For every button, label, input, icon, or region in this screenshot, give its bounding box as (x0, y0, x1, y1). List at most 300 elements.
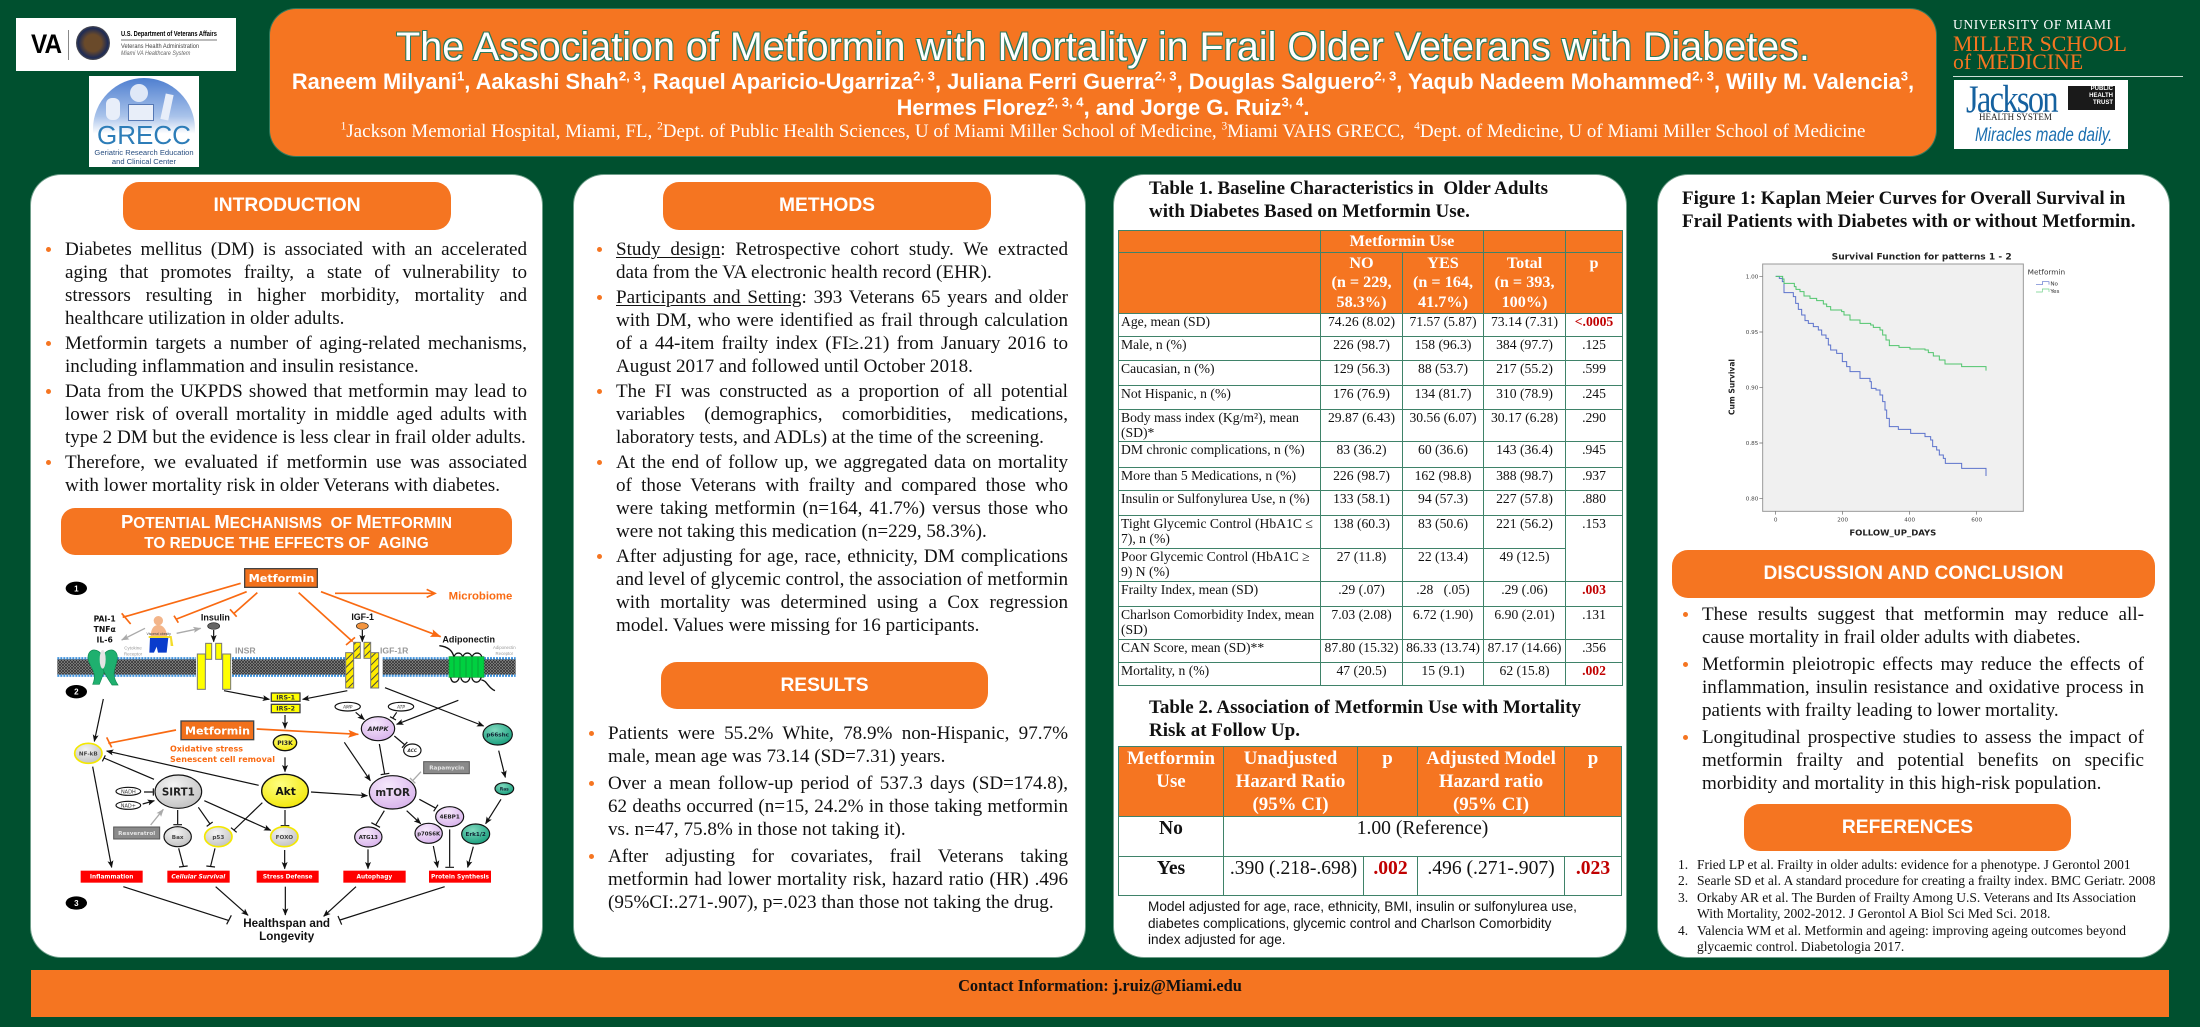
text block: introduction: including inflammation and insulin resistance. (65, 356, 419, 377)
logo: Jackson Health System: HEALTH (2089, 93, 2113, 99)
plot area (1763, 264, 2023, 511)
black molecule labels: Insulin (201, 612, 230, 622)
table 1: baseline characteristics: 133 (58.1) (1333, 491, 1390, 506)
logo: VA Miami: U.S. Department of Veterans Affairs (121, 29, 217, 38)
chart legend: No (2050, 282, 2059, 288)
orange metformin inhibition and activation arrows (107, 583, 441, 747)
y axis title: Cum Survival (1728, 359, 1737, 415)
IRS boxes: IRS-2 (276, 706, 295, 713)
step markers 1 2 3: 2 (74, 688, 79, 697)
table 2 title (1149, 697, 1581, 741)
table 1: baseline characteristics: .356 (1582, 640, 1606, 655)
heading: discussion and conclusion: DISCUSSION AND CONCLUSION (1764, 563, 2063, 584)
ligands (208, 623, 368, 629)
table 2: mortality risk: p (1382, 748, 1393, 769)
text block: methods: with DM, who were identified as frail through calculation (616, 310, 1068, 331)
heading: methods: METHODS (779, 195, 875, 216)
table 1: baseline characteristics: .29 (.07) (1338, 582, 1385, 597)
y axis ticks and labels (1746, 274, 1763, 503)
black molecule labels: Adiponectin (442, 634, 495, 644)
grey drug effects (151, 772, 421, 825)
table 1: baseline characteristics: .245 (1582, 386, 1606, 400)
text block: methods: laboratory tests, and ADLs) at the time of the screening. (616, 427, 1044, 448)
chart title: Survival Function for patterns 1 - 2 (1832, 253, 2012, 263)
orange labels: Senescent cell removal (170, 755, 275, 764)
table 1: baseline characteristics: Total (1507, 254, 1542, 272)
table 1: baseline characteristics: Not Hispanic, n (%) (1121, 386, 1231, 400)
black molecule labels: TNFα (94, 625, 116, 634)
table 1: baseline characteristics: .131 (1582, 607, 1606, 622)
grey nodes: NF-kB (79, 751, 98, 757)
table 1: baseline characteristics: 6.90 (2.01) (1494, 607, 1555, 622)
y axis ticks and labels: 0.85 (1746, 441, 1759, 447)
black inhibition lines (102, 712, 454, 925)
grey nodes: SIRT1 (162, 786, 195, 798)
orange labels: Oxidative stress (170, 745, 243, 754)
step markers 1 2 3: 3 (74, 899, 79, 908)
x axis ticks and labels: 400 (1904, 517, 1915, 523)
red outcome boxes (81, 871, 491, 883)
text block: discussion: morbidity and mortality in this high-risk population. (1702, 773, 2101, 794)
y axis ticks and labels: 0.90 (1746, 386, 1759, 392)
table 1: baseline characteristics: DM chronic complications, n (%) (1121, 442, 1305, 457)
table 1 title: with Diabetes Based on Metformin Use. (1149, 201, 1470, 222)
table 1: baseline characteristics: 86.33 (13.74) (1406, 640, 1480, 655)
yellow nodes: PI3K (277, 740, 293, 747)
table 2: mortality risk: Yes (1157, 858, 1185, 879)
table 1: baseline characteristics: .290 (1582, 410, 1606, 424)
black molecule labels: IGF-1 (351, 612, 374, 622)
x axis ticks and labels: 0 (1774, 517, 1778, 523)
text block: references: Searle SD et al. A standard procedure for creating a frailty index. BMC Geriatr. 2008 (1697, 873, 2156, 888)
text block: methods: of those Veterans with frailty and compared those who (616, 475, 1068, 496)
y axis ticks and labels: 0.95 (1746, 330, 1759, 336)
panel: tables (1114, 175, 1626, 957)
grey nodes: p53 (212, 835, 224, 841)
heading: introduction (123, 182, 451, 230)
table 2: mortality risk: Hazard Ratio (1236, 771, 1345, 792)
black molecule labels (94, 612, 495, 644)
table 1: baseline characteristics: .945 (1582, 442, 1606, 457)
panel: figure and discussion (1658, 175, 2169, 957)
grey nodes (75, 743, 298, 847)
table 1: baseline characteristics: .599 (1582, 360, 1606, 376)
text block: methods: August 2017 and followed until October 2018. (616, 356, 973, 377)
small white nodes: NAD+ (121, 803, 136, 809)
text block: results: male, mean age was 73.14 (SD=7.31) years. (608, 746, 945, 767)
table 1: baseline characteristics: 83 (36.2) (1336, 442, 1386, 457)
text block: discussion (1683, 604, 2144, 794)
red outcome boxes: Autophagy (356, 875, 392, 881)
text block: references (1678, 857, 2156, 954)
chart: Kaplan Meier survival curves (1728, 252, 2065, 538)
heading: potential mechanisms of metformin: POTENTIAL MECHANISMS OF METFORMIN (121, 511, 452, 532)
text block: methods (597, 239, 1068, 636)
table 1: baseline characteristics: 30.17 (6.28) (1491, 410, 1558, 424)
text block: introduction: Diabetes mellitus (DM) is associated with an accelerated (65, 239, 527, 260)
text block: introduction: aging that promotes frailty, a state of vulnerability to (65, 262, 527, 283)
table 1: baseline characteristics: .002 (1582, 663, 1606, 678)
small white nodes: AMP (342, 704, 353, 710)
small white nodes (116, 702, 421, 809)
text block: references: glycaemic control. Diabetologia 2017. (1697, 939, 1904, 954)
table 1: baseline characteristics: 100%) (1502, 292, 1547, 310)
insulin receptor INSR (197, 643, 256, 689)
text block: methods: were not taking this medication (n=229, 58.3%). (616, 521, 987, 542)
table 1: baseline characteristics: .28 (.05) (1416, 582, 1470, 597)
text block: methods: Participants and Setting: 393 Veterans 65 years and older (616, 287, 1068, 308)
table 1: baseline characteristics: (n = 393, (1494, 273, 1555, 291)
text block: introduction: stressors resulting in higher morbidity, mortality and (65, 285, 527, 306)
text block: results: vs. n=47, 75.8% in those not taking it). (608, 819, 906, 840)
y axis ticks and labels: 1.00 (1746, 274, 1759, 280)
drug boxes: Resveratrol (118, 831, 155, 837)
logo: GRECC: GRECC (97, 120, 191, 150)
table 1: baseline characteristics: 74.26 (8.02) (1328, 314, 1395, 328)
panel: methods and results (574, 175, 1085, 957)
table 1: baseline characteristics: .003 (1582, 582, 1606, 597)
heading: potential mechanisms of metformin (61, 508, 512, 555)
table 1: baseline characteristics: 94 (57.3) (1418, 491, 1468, 506)
IGF-1 receptor: IGF-1R (380, 645, 409, 655)
text block: results: Patients were 55.2% White, 78.9% non-Hispanic, 97.7% (608, 723, 1068, 744)
logo: VA Miami: VA (31, 29, 61, 59)
teal nodes: p66shc (486, 732, 509, 738)
table 2 footnote: Model adjusted for age, race, ethnicity, BMI, insulin or sulfonylurea use, (1148, 899, 1577, 914)
table 1 title: Table 1. Baseline Characteristics in Older Adults (1149, 178, 1548, 199)
text block: methods: were taking metformin (n=164, 41.7%) versus those who (616, 498, 1068, 519)
purple nodes: ATG13 (359, 835, 378, 841)
table 2: mortality risk: .496 (.271-.907) (1427, 858, 1555, 879)
cytokine receptor: Cytokine (124, 645, 142, 650)
table 1: baseline characteristics: .153 (1582, 516, 1606, 531)
table 1: baseline characteristics: 87.17 (14.66) (1488, 640, 1561, 655)
yellow nodes: Akt (275, 785, 296, 798)
x axis ticks and labels (1774, 511, 1982, 523)
logo: Jackson Health System: Miracles made daily. (1975, 125, 2112, 146)
table 1: baseline characteristics: 29.87 (6.43) (1328, 410, 1395, 424)
table 1: baseline characteristics: 49 (12.5) (1500, 549, 1550, 564)
orange labels: Microbiome (449, 590, 512, 602)
table 1: baseline characteristics: .125 (1582, 336, 1606, 352)
table 1 title (1149, 178, 1548, 222)
healthspan and longevity label (243, 917, 330, 943)
diagram: metformin mechanisms pathway (57, 568, 516, 943)
text block: discussion: Longitudinal prospective studies to assess the impact of (1702, 727, 2144, 748)
table 1: baseline characteristics: 143 (36.4) (1496, 442, 1553, 457)
adiponectin receptor: Adiponectin (493, 645, 516, 650)
black molecule labels: IL-6 (97, 635, 113, 644)
table 1: baseline characteristics: 226 (98.7) (1333, 468, 1390, 483)
text block: results: Over a mean follow-up period of 537.3 days (SD=174.8), (608, 773, 1068, 794)
adiponectin receptor (439, 645, 516, 691)
table 2 title: Risk at Follow Up. (1149, 720, 1300, 741)
table 2: mortality risk: 1.00 (Reference) (1357, 818, 1488, 839)
red outcome boxes: Inflammation (90, 875, 133, 881)
text block: results: 62 deaths occurred (n=15, 24.2% in those taking metformin (608, 796, 1068, 817)
text block: methods: model. Values were missing for 16 participants. (616, 615, 979, 636)
table 1: baseline characteristics: More than 5 Medications, n (%) (1121, 468, 1296, 483)
table 1: baseline characteristics: .29 (.06) (1501, 582, 1548, 597)
logo: VA Miami: Miami VA Healthcare System (121, 50, 190, 57)
footer: contact information: Contact Information: j.ruiz@Miami.edu (958, 976, 1242, 995)
step markers 1 2 3: 1 (74, 584, 79, 593)
table 1: baseline characteristics: 88 (53.7) (1418, 360, 1468, 376)
heading: discussion and conclusion (1672, 550, 2155, 598)
purple nodes: p70S6K (417, 831, 441, 837)
x axis title: FOLLOW_UP_DAYS (1849, 529, 1936, 538)
table 1: baseline characteristics: 384 (97.7) (1496, 336, 1553, 352)
table 1: baseline characteristics: 15 (9.1) (1421, 663, 1465, 678)
purple nodes: AMPK (367, 726, 389, 733)
insulin receptor INSR: INSR (235, 645, 256, 655)
table 1: baseline characteristics: 134 (81.7) (1415, 386, 1471, 400)
red outcome boxes: Protein Synthesis (431, 875, 490, 881)
teal nodes: Ras (500, 786, 509, 792)
purple nodes: mTOR (375, 787, 410, 799)
person icon: visceral obesity: Visceral obesity (146, 632, 171, 636)
small white nodes: ACC (407, 748, 418, 754)
chart legend: Yes (2049, 289, 2060, 295)
text block: results: After adjusting for covariates, frail Veterans taking (608, 846, 1068, 867)
text block: methods: of a 44-item frailty index (FI≥.21) from January 2016 to (616, 333, 1068, 354)
affiliations: 1Jackson Memorial Hospital, Miami, FL, 2Dept. of Public Health Sciences, U of Miami Miller School of Medicine, 3Miami VAHS GRECC, 4Dept. of Medicine, U of Miami Miller School of Medicine (341, 121, 1865, 142)
panel: introduction and mechanisms (31, 175, 542, 957)
yellow nodes (262, 735, 308, 808)
table 1: baseline characteristics: 73.14 (7.31) (1491, 314, 1558, 328)
table 1: baseline characteristics: 27 (11.8) (1337, 549, 1386, 564)
table 1: baseline characteristics: Frailty Index, mean (SD) (1121, 582, 1258, 597)
table 2: mortality risk: .023 (1576, 858, 1610, 879)
text block: results (589, 723, 1068, 913)
logo: University of Miami Miller School of Medicine: MILLER SCHOOL (1953, 32, 2127, 56)
table 1: baseline characteristics: YES (1427, 254, 1459, 272)
text block: references: 1. (1678, 857, 1688, 872)
table 1: baseline characteristics: (n = 164, (1413, 273, 1473, 291)
text block: results: (95%CI:.271-.907), p=.023 than those not taking the drug. (608, 892, 1054, 913)
table 1: baseline characteristics: Poor Glycemic Control (HbA1C ≥ 9) N (%) (1121, 549, 1310, 579)
text block: introduction: lower risk of overall mortality in middle aged adults with (65, 404, 527, 425)
text block: discussion: metformin frailty and potential benefits on specific (1702, 750, 2144, 771)
y axis ticks and labels: 0.80 (1746, 497, 1759, 503)
figure title: Frail Patients with Diabetes with or without Metformin. (1682, 211, 2135, 232)
red outcome boxes: Stress Defense (263, 875, 313, 881)
heading: methods (663, 182, 991, 230)
logo: Jackson Health System: PUBLIC (2091, 86, 2113, 92)
grey nodes: Bax (172, 835, 184, 841)
table 2 footnote (1148, 899, 1577, 947)
table 1: baseline characteristics: 87.80 (15.32) (1325, 640, 1398, 655)
metformin box middle: Metformin (185, 724, 250, 737)
grey nodes: FOXO (276, 835, 293, 841)
logo: University of Miami Miller School of Medicine: of MEDICINE (1953, 50, 2083, 74)
table 1: baseline characteristics: 41.7%) (1418, 292, 1468, 310)
text block: references: 3. (1678, 890, 1688, 905)
drug boxes (114, 762, 469, 839)
table 1: baseline characteristics: Body mass index (Kg/m²), mean (SD)* (1121, 410, 1299, 440)
table 1: baseline characteristics: 217 (55.2) (1496, 360, 1553, 376)
logo: VA Miami (16, 18, 236, 71)
text block: methods: The FI was constructed as a proportion of all potential (616, 381, 1068, 402)
table 1: baseline characteristics: 226 (98.7) (1333, 336, 1390, 352)
table 2: mortality risk: (95% CI) (1453, 794, 1529, 815)
text block: introduction: type 2 DM but the evidence is less clear in frail older adults. (65, 427, 526, 448)
drug boxes: Rapamycin (429, 766, 464, 772)
text block: introduction: Therefore, we evaluated if metformin use was associated (65, 452, 527, 473)
table 1: baseline characteristics: Mortality, n (%) (1121, 663, 1209, 678)
teal nodes (462, 724, 514, 844)
table 1: baseline characteristics: p (1590, 254, 1599, 272)
logo: Jackson Health System: Jackson (1966, 78, 2057, 121)
text block: methods: After adjusting for age, race, ethnicity, DM complications (616, 546, 1068, 567)
text block: references: 4. (1678, 923, 1688, 938)
x axis ticks and labels: 200 (1837, 517, 1848, 523)
table 2: mortality risk: .390 (.218-.698) (1230, 858, 1357, 879)
metformin box middle (181, 721, 254, 740)
table 1: baseline characteristics: CAN Score, mean (SD)** (1121, 640, 1264, 655)
table 2 title: Table 2. Association of Metformin Use with Mortality (1149, 697, 1581, 718)
logo: GRECC: Geriatric Research Education (94, 148, 194, 157)
text block: methods: At the end of follow up, we aggregated data on mortality (616, 452, 1068, 473)
small white nodes: ATP (396, 704, 405, 710)
logo: VA Miami: Veterans Health Administration (121, 43, 199, 50)
table 1: baseline characteristics: 6.72 (1.90) (1413, 607, 1473, 622)
teal nodes: Erk1/2 (465, 832, 486, 838)
table 1: baseline characteristics: 47 (20.5) (1336, 663, 1386, 678)
table 2: mortality risk: No (1159, 818, 1183, 839)
text block: references: 2. (1678, 873, 1688, 888)
heading: potential mechanisms of metformin: TO REDUCE THE EFFECTS OF AGING (144, 535, 429, 552)
footer: contact information (31, 970, 2169, 1017)
IRS boxes: IRS-1 (276, 694, 295, 701)
text block: discussion: These results suggest that metformin may reduce all- (1702, 604, 2144, 625)
text block: methods: with mortality was determined using a Cox regression (616, 592, 1068, 613)
table 1: baseline characteristics: 388 (98.7) (1496, 468, 1553, 483)
IRS boxes (271, 693, 300, 713)
table 1: baseline characteristics: .880 (1582, 491, 1606, 506)
table 1: baseline characteristics: 7.03 (2.08) (1331, 607, 1392, 622)
adiponectin receptor: Receptor (496, 651, 514, 656)
purple nodes (355, 717, 464, 847)
table 1: baseline characteristics: 221 (56.2) (1496, 516, 1553, 531)
metformin box top (245, 569, 317, 587)
table 2: mortality risk: Unadjusted (1244, 748, 1337, 769)
logo: University of Miami Miller School of Medicine (1953, 14, 2183, 77)
logo: GRECC (89, 76, 199, 167)
healthspan and longevity label: Healthspan and (243, 917, 330, 930)
text block: references: Orkaby AR et al. The Burden of Frailty Among U.S. Veterans and Its Association (1697, 890, 2136, 905)
heading: results (661, 662, 988, 709)
black activation arrows (93, 630, 505, 916)
table 1: baseline characteristics: Tight Glycemic Control (HbA1C ≤ 7), n (%) (1121, 516, 1313, 546)
table 1: baseline characteristics: Insulin or Sulfonylurea Use, n (%) (1121, 491, 1310, 506)
text block: discussion: cause mortality in frail older adults with diabetes. (1702, 627, 2081, 648)
figure title (1682, 188, 2135, 232)
chart legend: Metformin (2028, 267, 2065, 276)
heading: references (1744, 804, 2071, 851)
x axis ticks and labels: 600 (1971, 517, 1982, 523)
table 1: baseline characteristics: 71.57 (5.87) (1409, 314, 1477, 328)
table 2: mortality risk (1118, 746, 1622, 896)
cell membrane (57, 658, 516, 676)
table 1: baseline characteristics: 227 (57.8) (1496, 491, 1553, 506)
table 1: baseline characteristics: 58.3%) (1337, 292, 1386, 310)
table 2: mortality risk: p (1588, 748, 1598, 769)
text block: introduction (46, 239, 527, 496)
table 1: baseline characteristics: .937 (1582, 468, 1606, 483)
table 1: baseline characteristics: 30.56 (6.07) (1409, 410, 1477, 424)
table 1: baseline characteristics: 129 (56.3) (1333, 360, 1390, 376)
table 2: mortality risk: Hazard ratio (1439, 771, 1543, 792)
text block: methods: data from the VA electronic health record (EHR). (616, 262, 992, 283)
table 1: baseline characteristics: 176 (76.9) (1333, 386, 1390, 400)
table 1: baseline characteristics: Male, n (%) (1121, 336, 1187, 352)
cytokine receptor (88, 645, 143, 685)
table 1: baseline characteristics: <.0005 (1575, 314, 1613, 328)
text block: results: metformin had lower mortality risk, hazard ratio (HR) .496 (608, 869, 1068, 890)
text block: methods: and level of glycemic control, the association of metformin (616, 569, 1068, 590)
heading: results: RESULTS (780, 675, 869, 696)
table 2 footnote: diabetes complications, glycemic control and Charlson Comorbidity (1148, 916, 1551, 930)
IGF-1 receptor (346, 642, 409, 688)
orange labels (170, 590, 512, 764)
small white nodes: NADH (121, 789, 136, 795)
text block: introduction: Metformin targets a number of aging-related mechanisms, (65, 333, 527, 354)
logo: GRECC: and Clinical Center (112, 157, 176, 166)
metformin box top: Metformin (249, 572, 314, 585)
red outcome boxes: Cellular Survival (171, 875, 226, 881)
authors: Hermes Florez2, 3, 4, and Jorge G. Ruiz3, 4. (897, 95, 1309, 120)
table 1: baseline characteristics: 162 (98.8) (1415, 468, 1471, 483)
table 2: mortality risk: (95% CI) (1252, 794, 1329, 815)
figure title: Figure 1: Kaplan Meier Curves for Overall Survival in (1682, 188, 2125, 209)
text block: references: Fried LP et al. Frailty in older adults: evidence for a phenotype. J Gerontol 2001 (1697, 857, 2131, 872)
table 1: baseline characteristics: 310 (78.9) (1496, 386, 1553, 400)
table 1: baseline characteristics: Charlson Comorbidity Index, mean (SD) (1121, 607, 1314, 637)
person icon: visceral obesity (122, 616, 201, 653)
text block: introduction: healthcare utilization in older adults. (65, 308, 344, 329)
table 1: baseline characteristics: Caucasian, n (%) (1121, 360, 1215, 376)
logo: Jackson Health System: TRUST (2093, 100, 2113, 106)
heading: introduction: INTRODUCTION (213, 195, 361, 216)
heading: references: REFERENCES (1842, 817, 1973, 838)
logo: Jackson Health System: HEALTH SYSTEM (1979, 112, 2052, 122)
table 1: baseline characteristics: 62 (15.8) (1500, 663, 1550, 678)
authors: Raneem Milyani1, Aakashi Shah2, 3, Raquel Aparicio-Ugarriza2, 3, Juliana Ferri Guerra2, 3, Douglas Salguero2, 3, Yaqub Nadeem Mohammed2, 3, Willy M. Valencia3, (292, 69, 1914, 94)
text block: discussion: patients with frailty leading to lower mortality. (1702, 700, 2059, 721)
text block: references: Valencia WM et al. Metformin and ageing: improving ageing outcomes beyond (1697, 923, 2126, 938)
table 1: baseline characteristics: 158 (96.3) (1415, 336, 1471, 352)
table 1: baseline characteristics: (n = 229, (1331, 273, 1392, 291)
text block: methods: Study design: Retrospective cohort study. We extracted (616, 239, 1068, 260)
logo: University of Miami Miller School of Medicine: UNIVERSITY OF MIAMI (1953, 17, 2112, 32)
step markers 1 2 3 (66, 582, 87, 910)
curve: yes metformin (1776, 276, 1986, 371)
table 1: baseline characteristics: Metformin Use (1350, 232, 1454, 250)
poster title: The Association of Metformin with Mortality in Frail Older Veterans with Diabetes. (396, 25, 1810, 69)
curve: no metformin (1776, 276, 1986, 476)
table 2 footnote: index adjusted for age. (1148, 932, 1286, 947)
table 2: mortality risk: Adjusted Model (1426, 748, 1556, 769)
logo: Jackson Health System (1954, 80, 2128, 149)
text block: discussion: Metformin pleiotropic effects may reduce the effects of (1702, 654, 2144, 675)
table 2: mortality risk: Use (1156, 771, 1186, 792)
table 1: baseline characteristics: 83 (50.6) (1418, 516, 1468, 531)
black molecule labels: PAI-1 (94, 615, 116, 624)
table 2: mortality risk: .002 (1373, 858, 1408, 879)
title banner (270, 9, 1936, 156)
table 1: baseline characteristics: Age, mean (SD) (1121, 314, 1210, 328)
